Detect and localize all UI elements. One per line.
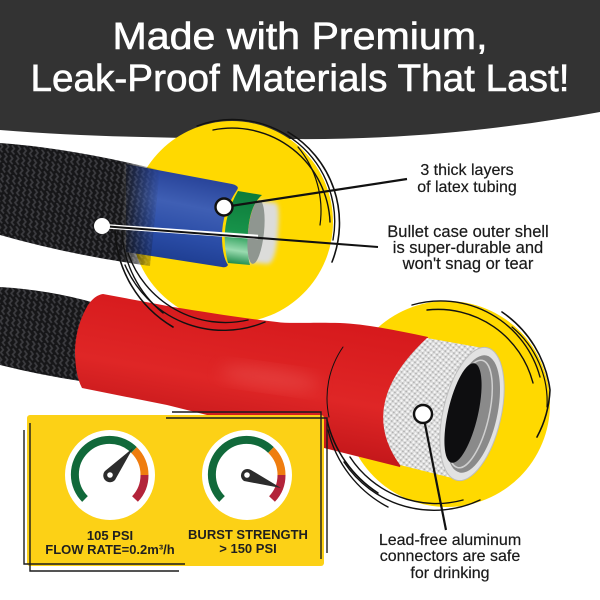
callout: outer shell xyxy=(94,218,549,273)
title xyxy=(30,16,570,100)
silver knurled connector xyxy=(383,338,516,487)
label: is super-durable and xyxy=(393,239,543,257)
title: Made with Premium, xyxy=(112,16,488,58)
tube: blue layer xyxy=(126,164,238,267)
callout: aluminum connectors xyxy=(379,405,521,582)
leader line xyxy=(102,226,378,247)
marker xyxy=(94,218,110,234)
marker xyxy=(216,198,232,216)
gauge: 105 PSI xyxy=(65,430,155,520)
label: for drinking xyxy=(410,565,490,582)
gauges panel xyxy=(24,412,327,571)
leader line xyxy=(224,179,407,207)
panel frame lines xyxy=(24,412,327,571)
accent arcs: upper circle top xyxy=(197,120,339,262)
label: won't snag or tear xyxy=(402,255,534,273)
label: Lead-free aluminum xyxy=(379,532,521,549)
label: connectors are safe xyxy=(380,548,520,565)
tube: inner opening xyxy=(245,199,267,265)
title: Leak-Proof Materials That Last! xyxy=(30,58,570,100)
gauge: burst strength xyxy=(202,430,292,520)
tube: white latex core xyxy=(245,200,279,264)
connector: thread ridges xyxy=(439,356,501,472)
sleeve body xyxy=(75,294,428,467)
header band xyxy=(0,0,600,139)
leader line halo xyxy=(102,226,258,237)
label: Bullet case outer shell xyxy=(387,223,549,241)
yellow circle: connector xyxy=(344,301,550,507)
accent arcs: upper circle bottom xyxy=(115,230,265,330)
lower black hose xyxy=(0,287,95,381)
connector: inner thread xyxy=(436,350,510,478)
accent arcs: lower circle xyxy=(327,301,550,510)
hose: black braided outer shell xyxy=(0,143,160,266)
marker xyxy=(414,405,432,423)
label: 3 thick layers xyxy=(420,162,514,179)
gauge label: flow rate: FLOW RATE=0.2m³/h xyxy=(45,542,175,557)
callout: latex tubing xyxy=(216,162,517,216)
gauge label: burst strength: > 150 PSI xyxy=(219,541,277,556)
yellow circle: hose layers xyxy=(131,121,333,323)
connector: knurled body xyxy=(383,338,483,480)
connector: front ring xyxy=(428,341,516,487)
red connector sleeve xyxy=(75,294,428,467)
label: of latex tubing xyxy=(417,179,517,196)
hose: inner tube layers xyxy=(126,164,279,267)
gauge label: flow rate: 105 PSI xyxy=(87,528,133,543)
sleeve highlight xyxy=(219,361,321,395)
panel background xyxy=(27,415,324,566)
leader line xyxy=(423,414,446,530)
connector: dark opening xyxy=(437,360,489,466)
tube: green layer xyxy=(225,191,262,265)
gauge label: burst strength: BURST STRENGTH xyxy=(188,527,308,542)
